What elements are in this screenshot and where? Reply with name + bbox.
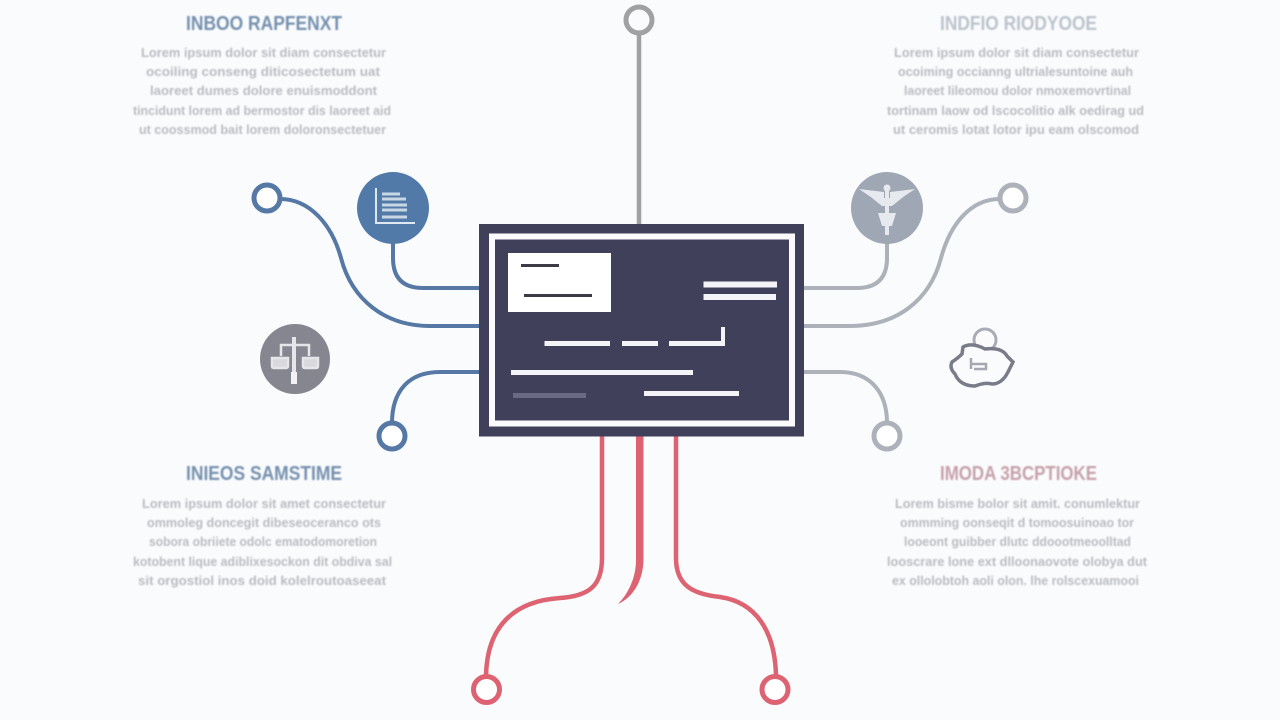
- connector: red center taper: [618, 436, 644, 604]
- icon: balance scale: [260, 324, 330, 394]
- connector: grey lower curve: [804, 372, 900, 449]
- text block: top right: Lorem ipsum dolor sit diam consectetur: [894, 45, 1139, 60]
- chip lines: [511, 282, 777, 398]
- text block: bottom left: ommoleg doncegit dibeseoceranco ots: [147, 515, 381, 530]
- connector: red right curve: [676, 436, 788, 702]
- text block: bottom left: sit orgostiol inos doid kolelroutoaseeat: [138, 573, 387, 588]
- text block: top right: laoreet lileomou dolor nmoxemovrtinal: [904, 83, 1131, 98]
- text block: top left: [133, 45, 391, 137]
- text block: top left: ut coossmod bait lorem doloronsectetuer: [139, 122, 386, 137]
- text block: top left: Lorem ipsum dolor sit diam consectetur: [141, 45, 386, 60]
- text block: top right: ocoiming occianng ultrialesuntoine auh: [898, 64, 1133, 79]
- panel: top left text: [133, 13, 391, 137]
- connector: blue upper curve: [254, 185, 480, 326]
- icon: bar chart: [357, 172, 429, 244]
- heading: bottom right: IMODA 3BCPTIOKE: [940, 463, 1097, 485]
- chip label box: [508, 253, 611, 312]
- text block: top left: tincidunt lorem ad bermostor dis laoreet aid: [133, 103, 391, 118]
- text block: top left: ocoiling conseng diticosectetum uat: [146, 64, 381, 79]
- text block: bottom right: looeont guibber dlutc ddoootmeoolltad: [904, 534, 1131, 549]
- text block: bottom left: [133, 496, 392, 588]
- icon: caduceus: [851, 172, 923, 244]
- connector: grey upper curve: [804, 185, 1026, 326]
- text block: top right: tortinam laow od lscocolitio alk oedirag ud: [887, 103, 1144, 118]
- heading: top right: INDFIO RIODYOOE: [940, 13, 1097, 35]
- connector: top grey: [626, 7, 652, 225]
- panel: top right text: [887, 13, 1144, 137]
- text block: bottom right: looscrare lone ext dlloonaovote olobya dut: [887, 554, 1148, 569]
- text block: bottom left: kotobent lique adiblixesockon dit obdiva sal: [133, 554, 392, 569]
- connector: blue lower curve: [379, 372, 480, 449]
- panel: bottom right text: [887, 463, 1148, 588]
- connector: red left curve: [474, 436, 602, 702]
- text block: bottom left: sobora obriiete odolc ematodomoretion: [149, 534, 377, 549]
- text block: bottom right: ommming oonseqit d tomoosuinoao tor: [900, 515, 1134, 530]
- heading: bottom left: INIEOS SAMSTIME: [186, 463, 342, 485]
- connector: blue chart icon link: [393, 240, 480, 288]
- connector: grey caduceus icon link: [804, 240, 887, 288]
- text block: top right: [887, 45, 1144, 137]
- text block: bottom right: Lorem bisme bolor sit amit. conumlektur: [895, 496, 1140, 511]
- text block: bottom right: [887, 496, 1148, 588]
- text block: bottom left: Lorem ipsum dolor sit amet consectetur: [142, 496, 386, 511]
- central chip card: [479, 224, 804, 436]
- panel: bottom left text: [133, 463, 392, 588]
- icon: piggy bank: [951, 329, 1013, 386]
- heading: top left: INBOO RAPFENXT: [186, 13, 342, 35]
- text block: top right: ut ceromis lotat lotor ipu eam olscomod: [893, 122, 1139, 137]
- text block: top left: laoreet dumes dolore enuismoddont: [150, 83, 378, 98]
- text block: bottom right: ex ollolobtoh aoli olon. lhe rolscexuamooi: [892, 573, 1139, 588]
